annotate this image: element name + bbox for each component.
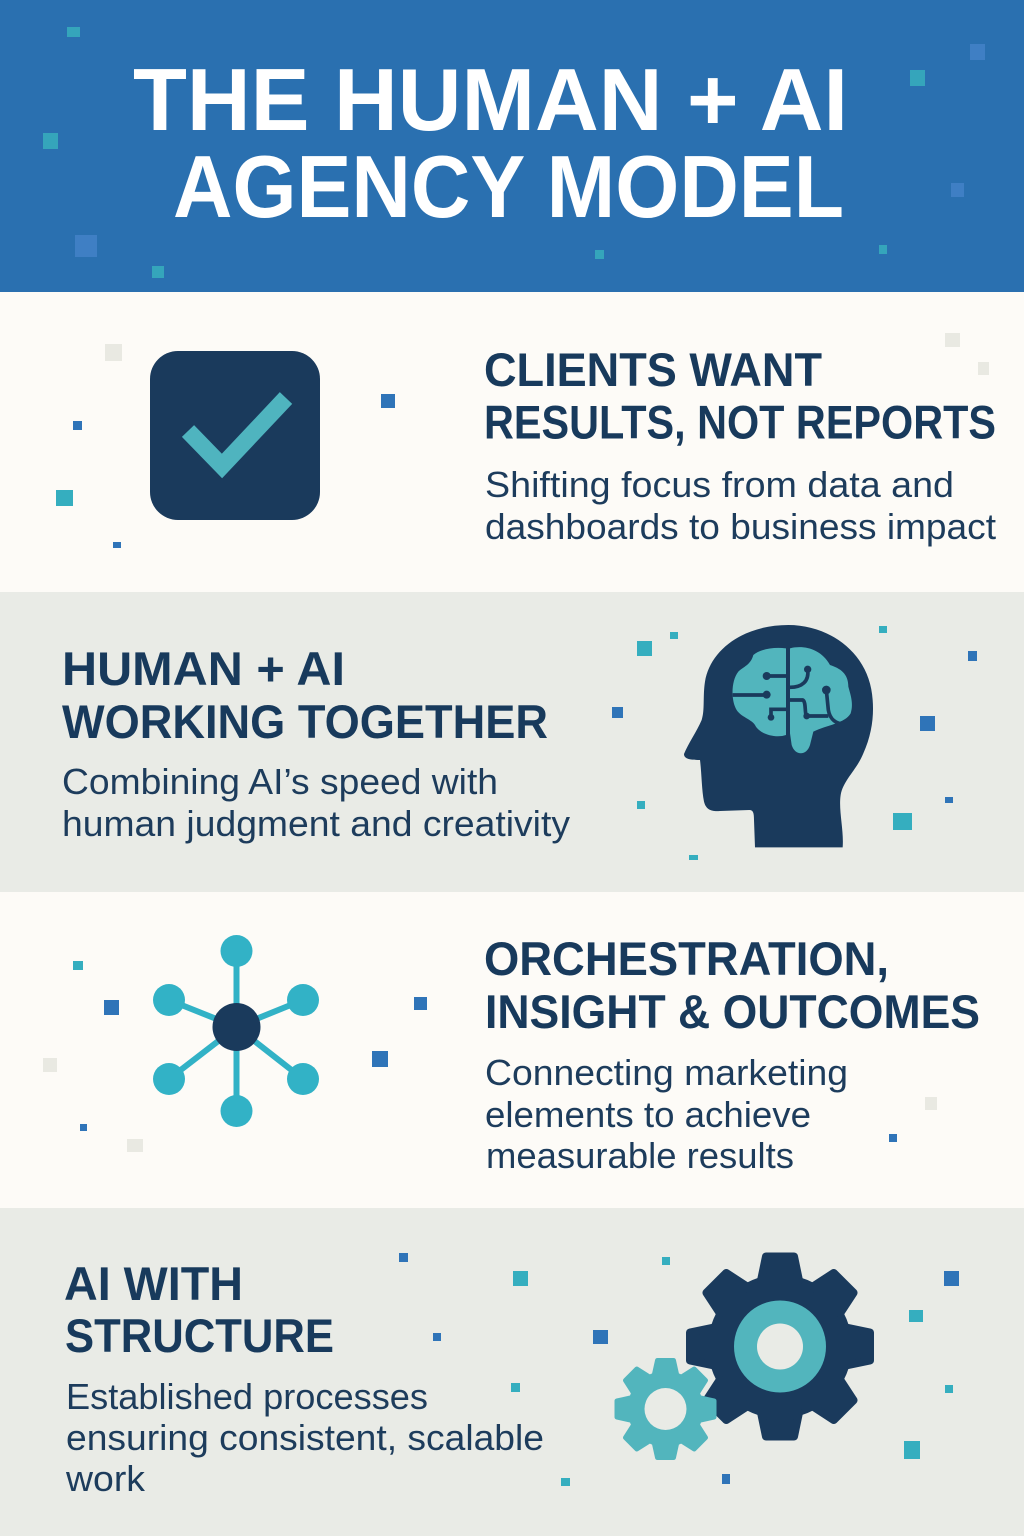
text block: AI with structure [65,1376,544,1499]
text block: clients want results [485,464,996,547]
icon: check mark [150,351,320,520]
heading: clients want results: CLIENTS WANT [484,343,822,396]
text block: human + AI: Combining AI’s speed with [62,761,498,802]
icon: network hub [153,935,319,1127]
icon: head with circuit brain [684,625,873,847]
panel: AI with structure [0,1208,1024,1536]
heading: AI with structure: STRUCTURE [65,1309,334,1362]
panel: orchestration [0,892,1024,1208]
heading: human + AI [62,642,548,748]
heading: clients want results [484,343,996,448]
heading: AI with structure [64,1257,334,1362]
text block: human + AI: human judgment and creativity [62,803,571,844]
text block: AI with structure: work [65,1458,146,1499]
text block: AI with structure: Established processes [66,1376,428,1417]
icon: large gear [690,1256,870,1436]
text block: AI with structure: ensuring consistent, scalable [66,1417,544,1458]
title: AGENCY MODEL [173,137,844,236]
text block: orchestration: elements to achieve [485,1094,811,1135]
heading: AI with structure: AI WITH [64,1257,243,1310]
text block: human + AI [62,761,571,844]
heading: orchestration: ORCHESTRATION, [484,932,889,985]
text block: clients want results: Shifting focus from data and [485,464,954,505]
title [133,50,848,236]
panel: clients want results [0,292,1024,592]
text block: orchestration [485,1052,848,1176]
heading: human + AI: HUMAN + AI [62,642,345,695]
text block: orchestration: Connecting marketing [485,1052,848,1093]
text block: orchestration: measurable results [486,1135,794,1176]
panel: header [0,0,1024,292]
heading: orchestration: INSIGHT & OUTCOMES [485,985,980,1038]
text block: clients want results: dashboards to business impact [485,506,996,547]
heading: human + AI: WORKING TOGETHER [62,695,548,748]
icon: small gear [617,1360,714,1458]
title: THE HUMAN + AI [133,50,848,149]
panel: human + AI [0,592,1024,892]
heading: orchestration [484,932,980,1038]
